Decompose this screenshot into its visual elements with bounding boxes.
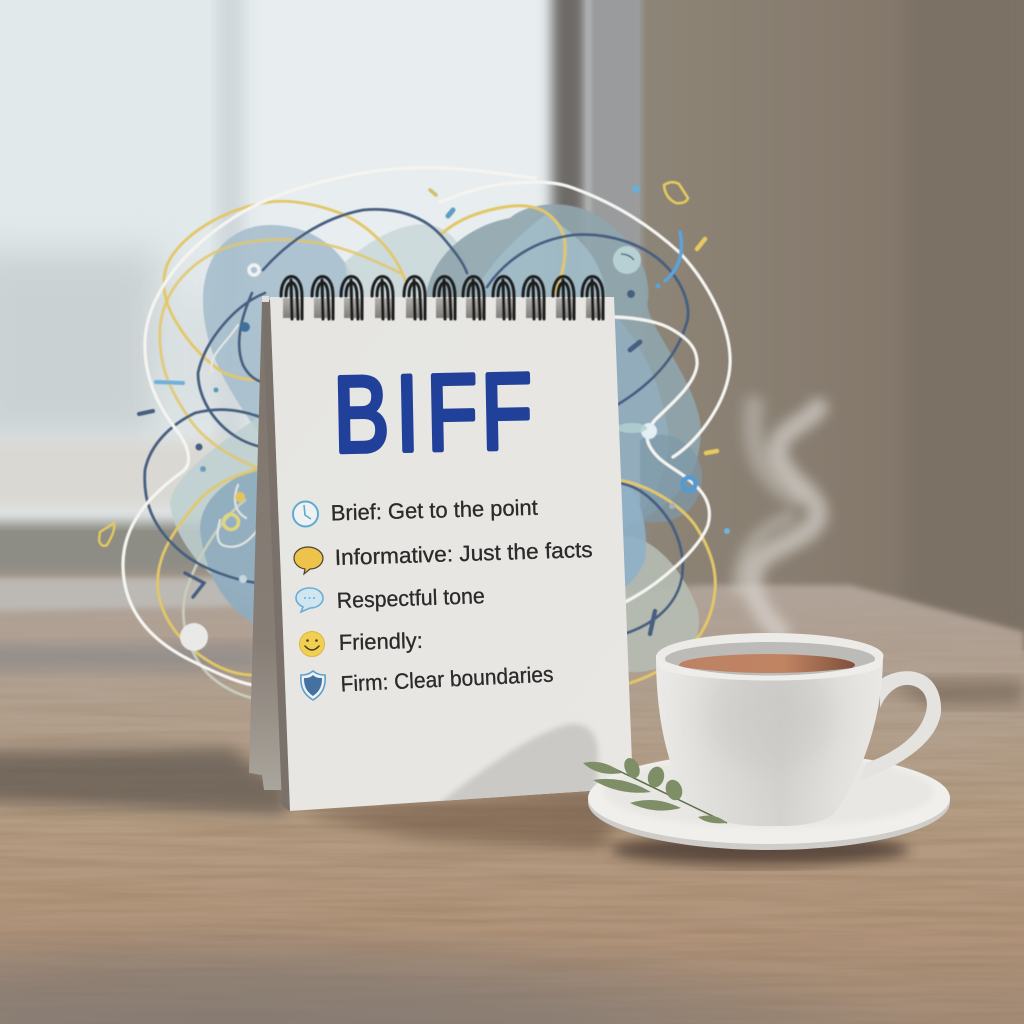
abstract scribble cloud behind the notepad (99, 168, 730, 698)
cup shading (708, 680, 832, 756)
page shadow (440, 722, 600, 801)
cup body (656, 655, 883, 826)
ring shadows (283, 298, 603, 318)
translucent blue and green blobs (170, 204, 702, 672)
cup interior (665, 642, 875, 676)
list item: Brief (293, 495, 538, 526)
text: Respectful: Respectful tone (336, 583, 485, 613)
cup rim (656, 633, 884, 679)
icon: blue speech bubble (296, 588, 323, 612)
icon: shield (301, 671, 325, 700)
back pages of the notepad (249, 296, 290, 811)
front page (270, 297, 633, 811)
title: BIFF: BIFF (332, 352, 533, 475)
list item: Friendly (300, 628, 423, 656)
list item: Respectful (296, 583, 485, 613)
list item: Firm (301, 661, 554, 700)
text: Brief: Brief: Get to the point (330, 495, 538, 525)
text: Firm: Firm: Clear boundaries (340, 661, 554, 696)
steam rising from the cup (738, 405, 818, 632)
icon: clock (293, 502, 318, 526)
cup and saucer (583, 633, 950, 865)
tea surface (679, 654, 855, 673)
confetti dots and dashes (99, 182, 730, 651)
leaf sprig (583, 756, 727, 823)
navy lines (139, 209, 688, 634)
saucer (588, 752, 950, 850)
handle (860, 671, 941, 780)
text: Friendly: Friendly: (338, 628, 423, 655)
spiral binding (281, 276, 603, 319)
notepad (249, 276, 633, 815)
pale and yellow lines (158, 201, 715, 698)
front lip (656, 656, 883, 680)
icon: yellow speech bubble (294, 547, 323, 574)
white lines (123, 168, 730, 685)
text: Informative: Informative: Just the facts (334, 537, 593, 570)
saucer shadow (610, 835, 910, 865)
icon: smiley (300, 632, 324, 656)
list item: Informative (294, 537, 593, 574)
